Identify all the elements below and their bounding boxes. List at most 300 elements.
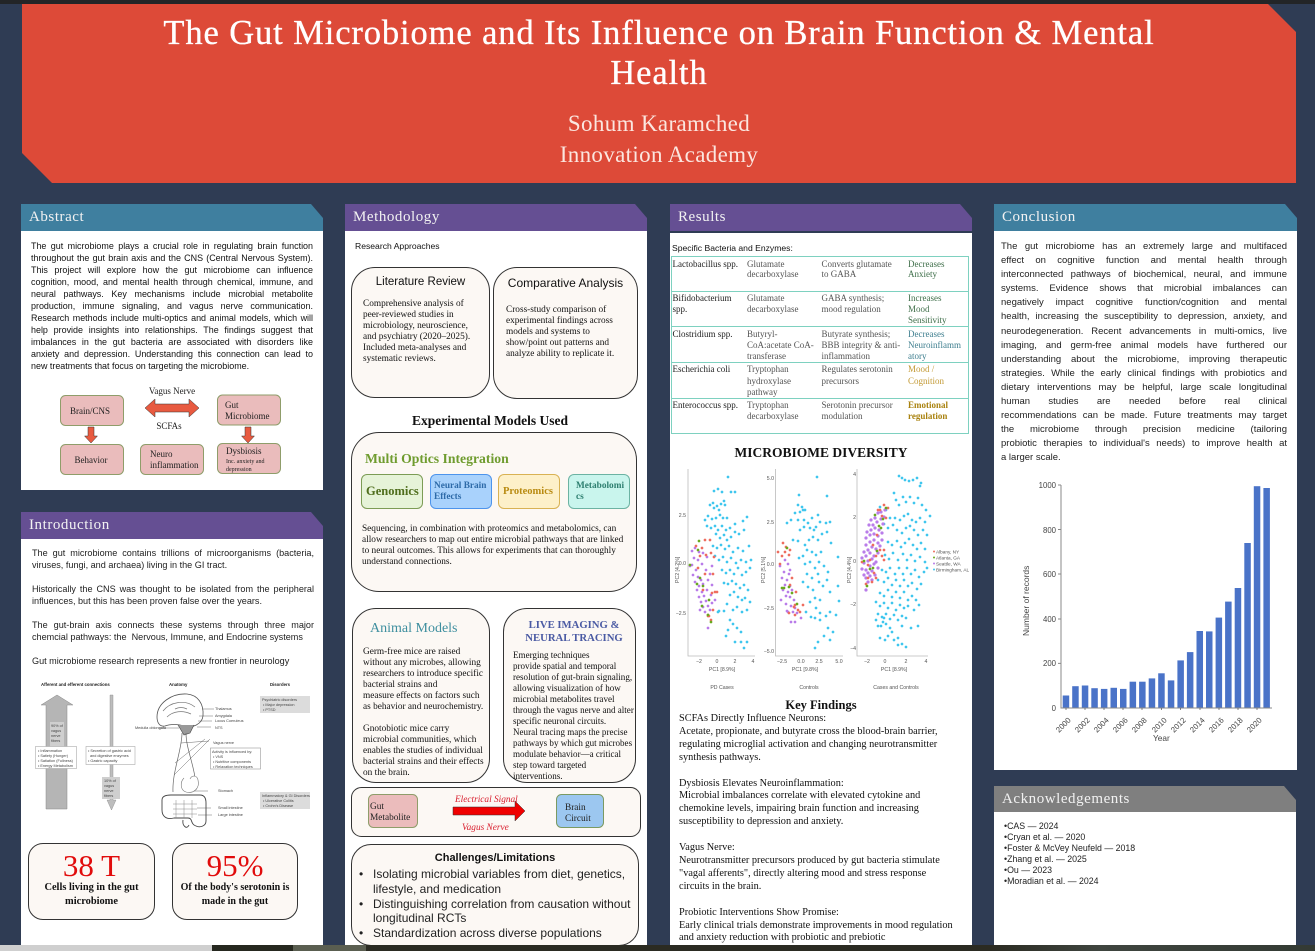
signal flow diagram: Vagus Nerve <box>462 823 509 833</box>
bar chart: number of records by year: Number of records <box>1021 566 1031 636</box>
animal models text: enables the studies of individual <box>363 746 483 756</box>
comparative analysis text <box>506 305 614 359</box>
key findings text: chemokine levels, impairing brain function and increasing <box>679 803 919 814</box>
conclusion text: neurodegeneration. Recent advancements in multi-omics, live <box>1001 326 1287 337</box>
live imaging text: modulate behavior—a critical <box>513 749 621 759</box>
gut-brain anatomy figure: fibers <box>104 794 113 798</box>
gut-brain anatomy figure: Inflammatory & GI Disorders <box>262 794 310 798</box>
scatter plot axes and legend: 4 <box>752 659 755 665</box>
bacteria and enzymes table: decarboxylase <box>747 304 798 314</box>
animal models text: bacterial strains and <box>363 680 437 690</box>
scatter plot axes and legend: −4 <box>850 646 856 652</box>
gut-brain axis flow diagram: Microbiome <box>225 411 270 421</box>
conclusion heading <box>994 204 1297 231</box>
author and school: Innovation Academy <box>560 142 758 167</box>
signal flow diagram: Circuit <box>565 814 591 824</box>
gut-brain anatomy figure: 90% of <box>51 724 64 728</box>
gut-brain anatomy figure: 10% of <box>104 779 117 783</box>
challenges list: Distinguishing correlation from causation without <box>373 897 630 911</box>
scatter plot axes and legend: Albany, NY <box>936 550 960 554</box>
key findings text: "vagal afferents", directly altering mood and stress response <box>679 868 926 879</box>
signal flow diagram: Metabolite <box>370 813 410 823</box>
abstract text: new treatments that focus on targeting the microbiome. <box>31 361 249 371</box>
gut-brain anatomy figure: Psychiatric disorders <box>262 698 297 702</box>
live imaging text: provide spatial and temporal <box>513 661 616 671</box>
key findings text: Neurotransmitter precursors produced by gut bacteria stimulate <box>679 855 940 866</box>
bacteria and enzymes table: hydroxylase <box>747 376 791 386</box>
challenges list: lifestyle, and medication <box>373 882 501 896</box>
results heading <box>670 204 972 231</box>
gut-brain anatomy figure: Disorders <box>270 682 291 687</box>
comparative analysis text: Cross-study comparison of <box>506 305 606 315</box>
chip: proteomics: Proteomics <box>503 486 553 497</box>
chip: metabolomics: cs <box>576 492 584 502</box>
introduction text: viruses, fungi, and archaea) living in the GI tract. <box>32 560 227 570</box>
scatter plot axes and legend: −2.5 <box>777 659 787 665</box>
acknowledgements list: •CAS — 2024 <box>1004 821 1058 831</box>
introduction heading <box>21 512 323 539</box>
gut-brain anatomy figure: vagus <box>51 729 61 733</box>
multi optics text: understand connections. <box>362 557 452 567</box>
author and school: Sohum Karamched <box>568 111 750 136</box>
bacteria and enzymes table: Increases <box>908 293 942 303</box>
scatter plot axes and legend: 2.5 <box>767 520 774 526</box>
gut-brain axis flow diagram: Inc. anxiety and <box>226 459 264 465</box>
abstract text: imbalances in the gut bacteria are associated with disorders like <box>31 337 313 347</box>
chip: neural brain effects: Neural Brain <box>434 480 486 490</box>
bacteria and enzymes table: Butyrate synthesis; <box>822 329 890 339</box>
animal models text: on the brain. <box>363 768 410 778</box>
bacteria and enzymes table: Escherichia coli <box>672 364 731 374</box>
scatter plot axes and legend: PC1 [9.8%] <box>792 667 819 673</box>
gut-brain anatomy figure: Thalamus <box>215 707 232 711</box>
bacteria and enzymes table: Tryptophan <box>747 400 789 410</box>
scatter plot axes and legend: Seattle, WA <box>936 562 961 566</box>
introduction text: Gut microbiome research represents a new frontier in neurology <box>32 656 289 666</box>
introduction heading: Introduction <box>29 517 110 533</box>
abstract text: cognition, mood, and mental health through chemical, immune, and <box>31 277 313 287</box>
animal models text: without any microbes, allowing <box>363 658 481 668</box>
introduction text: chemcial pathways: the Nervous, Immune, and Endocrine systems <box>32 632 303 642</box>
gut-brain axis flow diagram: Gut <box>225 400 239 410</box>
gut-brain axis flow diagram: Brain/CNS <box>70 406 110 416</box>
conclusion text: strategies. While the early clinical findings with probiotics and <box>1001 368 1287 379</box>
methodology body background <box>345 231 647 945</box>
bacteria and enzymes table: pathway <box>747 387 778 397</box>
scatter plot axes and legend: 0 <box>716 659 719 665</box>
scatter plot axes and legend: Atlanta, GA <box>936 556 961 560</box>
gut-brain anatomy figure: Locus Coeruleus <box>215 719 244 723</box>
gut-brain axis flow diagram: Vagus Nerve <box>149 386 195 396</box>
conclusion text: probiotic therapies to individual's needs) to improve health at <box>1001 438 1287 449</box>
scatter plot axes and legend: PC1 [8.9%] <box>709 667 736 673</box>
live imaging text: interventions. <box>513 771 562 781</box>
scatter plot axes and legend: Controls <box>799 685 819 691</box>
conclusion text: recommendations can be made. Future treatments may target <box>1001 410 1287 421</box>
live imaging text: pathways by which gut microbes <box>513 738 632 748</box>
bacteria and enzymes table: modulation <box>822 411 863 421</box>
bar chart: number of records by year: 2008 <box>1130 716 1149 734</box>
stat caption: cells in gut: Cells living in the gut <box>44 882 139 893</box>
gut-brain anatomy figure: NTS <box>215 726 223 730</box>
gut-brain anatomy figure: Large intestine <box>218 813 243 817</box>
challenges list: • <box>359 897 363 911</box>
challenges title: Challenges/Limitations <box>435 852 555 864</box>
key findings text: susceptibility to depression and anxiety. <box>679 816 843 827</box>
gut-brain anatomy figure: Vagus nerve <box>213 741 234 745</box>
bacteria and enzymes table: regulation <box>908 411 947 421</box>
scatter plot axes and legend: 2.5 <box>679 513 686 519</box>
conclusion body background <box>994 231 1297 770</box>
gut-brain anatomy figure: Small intestine <box>218 806 243 810</box>
acknowledgements list: •Ou — 2023 <box>1004 865 1052 875</box>
bar chart: number of records by year: 600 <box>1043 570 1057 579</box>
animal models text: Germ-free mice are raised <box>363 647 460 657</box>
title: The Gut Microbiome and Its Influence on Brain Function & Mental <box>163 14 1155 52</box>
comparative analysis title: Comparative Analysis <box>508 276 623 290</box>
microbiome diversity heading: MICROBIOME DIVERSITY <box>735 445 907 460</box>
gut-brain axis flow diagram: Behavior <box>74 455 108 465</box>
scatter plot axes and legend: 2 <box>734 659 737 665</box>
bar chart: number of records by year: 2010 <box>1150 715 1169 734</box>
live imaging text <box>513 650 634 781</box>
comparative analysis text: show/point out patterns and <box>506 338 609 348</box>
gut-brain anatomy figure: nerve <box>104 789 114 793</box>
abstract text: production, immune signaling, and vagus nerve communication. <box>31 301 313 311</box>
gut-brain axis flow diagram: Dysbiosis <box>226 446 262 456</box>
scatter plot axes and legend: 0.0 <box>797 659 805 665</box>
key findings text: Probiotic Interventions Show Promise: <box>679 907 839 918</box>
multi optics text: Sequencing, in combination with proteomics and metabolomics, can <box>362 524 616 534</box>
bacteria and enzymes table: CoA:acetate CoA- <box>747 340 814 350</box>
bacteria and enzymes table: inflammation <box>822 351 870 361</box>
scatter plot axes and legend: Cases and Controls <box>873 685 919 691</box>
signal flow diagram: Gut <box>370 802 384 812</box>
gut-brain anatomy figure: • Satiety (Hunger) <box>38 754 69 758</box>
conclusion text: The gut microbiome has an extremely large and multifaced <box>1001 241 1287 252</box>
bacteria and enzymes table: Lactobacillus spp. <box>672 259 738 269</box>
abstract text <box>31 241 313 371</box>
gut-brain axis flow diagram <box>60 386 281 475</box>
scatter plot axes and legend: −2.5 <box>764 606 774 612</box>
chip: neural brain effects <box>430 474 492 509</box>
bottom screen edge strip <box>0 945 1315 951</box>
abstract text: This project will explore how the gut microbiome can influence <box>31 265 313 275</box>
scatter plot axes and legend: Birmingham, AL <box>936 568 969 572</box>
key findings text: Dysbiosis Elevates Neuroinflammation: <box>679 778 844 789</box>
bar chart: number of records by year: 2002 <box>1073 716 1092 734</box>
scatter plot axes and legend: 2.5 <box>815 659 823 665</box>
animal models text: Gnotobiotic mice carry <box>363 724 449 734</box>
scatter plot axes and legend: 5.0 <box>835 659 843 665</box>
key findings text: Acetate, propionate, and butyrate cross the blood-brain barrier, <box>679 726 938 737</box>
bacteria and enzymes table: GABA synthesis; <box>822 293 884 303</box>
bacteria and enzymes table: Bifidobacterium <box>672 293 731 303</box>
live imaging title <box>525 619 623 644</box>
live imaging text: Neural tracing maps the precise <box>513 727 628 737</box>
bacteria and enzymes table: precursors <box>822 376 859 386</box>
bacteria and enzymes table: Butyryl- <box>747 329 778 339</box>
introduction text: influences, but this has been proven false over the years. <box>32 596 262 606</box>
gut-brain anatomy figure: • Energy Metabolism <box>38 764 73 768</box>
scatter plot axes and legend: PC2 [5.1%] <box>761 556 767 583</box>
live imaging text: step toward targeted <box>513 760 586 770</box>
acknowledgements list: •Foster & McVey Neufeld — 2018 <box>1004 843 1135 853</box>
bacteria and enzymes table: Glutamate <box>747 259 784 269</box>
methodology heading: Methodology <box>353 209 440 225</box>
stat caption: cells in gut: microbiome <box>65 896 118 907</box>
gut-brain anatomy figure: • Major depression <box>263 703 295 707</box>
gut-brain anatomy figure: Afferent and efferent connections <box>41 682 110 687</box>
bacteria and enzymes table: Anxiety <box>908 269 937 279</box>
results heading: Results <box>678 209 726 225</box>
stat number: 38 T: 38 T <box>63 848 120 883</box>
methodology heading <box>345 204 647 231</box>
gut-brain anatomy figure: Medulla oblongata <box>135 726 167 730</box>
gut-brain anatomy figure: nerve <box>51 734 60 738</box>
conclusion text: interconnected pathways of biochemical, neural, and immune <box>1001 269 1287 280</box>
bacteria and enzymes table: Decreases <box>908 329 945 339</box>
bar chart: number of records by year: 2004 <box>1092 715 1111 734</box>
gut-brain anatomy figure: • Crohn's Disease <box>263 804 293 808</box>
bar chart: number of records by year: 400 <box>1043 615 1057 624</box>
animal models text: measure effects on factors such <box>363 691 480 701</box>
scatter plot axes and legend: −2 <box>864 659 870 665</box>
introduction text: The gut microbiome contains trillions of microorganisms (bacteria, <box>32 548 314 558</box>
animal models text: microbial communities, which <box>363 735 476 745</box>
bacteria and enzymes table: spp. <box>672 304 687 314</box>
scatter plot axes and legend: PD Cases <box>710 685 734 691</box>
scatter plot axes and legend: −2.5 <box>676 611 686 617</box>
scatter plot axes and legend: PC1 [8.9%] <box>881 667 908 673</box>
chip: proteomics <box>498 474 560 509</box>
gut-brain axis flow diagram: SCFAs <box>156 421 182 431</box>
gut-brain anatomy figure: and digestive enzymes <box>90 754 129 758</box>
bacteria and enzymes table: mood regulation <box>822 304 881 314</box>
live imaging text: resolution of gut-brain signaling, <box>513 672 632 682</box>
abstract text: The gut microbiome plays a crucial role in regulating brain function <box>31 241 313 251</box>
bacteria and enzymes table: Tryptophan <box>747 364 789 374</box>
scatter plot axes and legend: PC2 [4.2%] <box>675 556 681 583</box>
stat number: 95%: 95% <box>207 848 263 883</box>
scatter plot axes and legend: 0 <box>853 559 856 565</box>
animal models text: bacterial strains and their effects <box>363 757 484 767</box>
stat caption: cells in gut <box>44 882 139 907</box>
gut-brain axis flow diagram: inflammation <box>150 460 199 470</box>
live imaging text: allowing visualization of how <box>513 683 621 693</box>
experimental models heading: Experimental Models Used <box>412 413 568 428</box>
animal models title: Animal Models <box>370 621 458 636</box>
bar chart: number of records by year: 0 <box>1052 704 1057 713</box>
gut-brain anatomy figure: vagus <box>104 784 114 788</box>
gut-brain anatomy figure: Anatomy <box>169 682 188 687</box>
literature review text: and psychiatry (2020–2025). <box>363 332 470 342</box>
literature review text: microbiology, neuroscience, <box>363 321 468 331</box>
comparative analysis text: experimental findings across <box>506 316 613 326</box>
bacteria and enzymes table: atory <box>908 351 927 361</box>
key findings text: regulating microglial activation and changing neurotransmitter <box>679 739 937 750</box>
conclusion text: negatively impact cognitive function/cognition and mental <box>1001 297 1287 308</box>
bacteria and enzymes table: Regulates serotonin <box>822 364 893 374</box>
abstract body background <box>21 231 323 490</box>
panel: conclusion <box>994 204 1297 770</box>
literature review text <box>363 299 470 364</box>
bar chart: number of records by year: 2016 <box>1207 716 1226 734</box>
conclusion text: dietary interventions may be helpful, large scale longitudinal <box>1001 382 1287 393</box>
bacteria and enzymes table: Enterococcus spp. <box>672 400 738 410</box>
chip: genomics: Genomics <box>366 484 419 498</box>
key findings text: circuits in the brain. <box>679 881 761 892</box>
bacteria and enzymes table: decarboxylase <box>747 411 798 421</box>
chip: metabolomics: Metabolomi <box>576 480 624 490</box>
literature review text: systematic reviews. <box>363 354 436 364</box>
animal models text: as behavior and neurochemistry. <box>363 702 483 712</box>
key findings text: Microbial imbalances correlate with elevated cytokine and <box>679 790 920 801</box>
panel: results <box>670 204 972 945</box>
bacteria and enzymes table: Clostridium spp. <box>672 329 733 339</box>
scatter plot axes and legend: 0 <box>884 659 887 665</box>
stat caption: serotonin: Of the body's serotonin is <box>181 882 289 893</box>
stat caption: serotonin: made in the gut <box>202 896 268 907</box>
live imaging title: LIVE IMAGING & <box>529 619 619 631</box>
introduction text: The gut-brain axis connects these systems through three major <box>32 620 314 630</box>
gut-brain anatomy figure: • Relaxation techniques <box>213 765 253 769</box>
bar chart: number of records by year: 800 <box>1043 526 1057 535</box>
scatter plots: microbiome diversity <box>675 469 969 691</box>
abstract text: anxiety and depression. Understanding this connection can lead to <box>31 349 313 359</box>
live imaging text: specific neuronal circuits. <box>513 716 606 726</box>
literature review text: Comprehensive analysis of <box>363 299 464 309</box>
literature review text: peer-reviewed studies in <box>363 310 454 320</box>
live imaging text: microbial metabolites travel <box>513 694 614 704</box>
comparative analysis text: analyze ability to replicate it. <box>506 349 614 359</box>
gut-brain anatomy figure: Amygdala <box>215 714 233 718</box>
panel: acknowledgements <box>994 786 1296 945</box>
multi optics text: allow researchers to map out entire microbial pathways that are linked <box>362 535 623 545</box>
scatter plot axes and legend: −5.0 <box>764 649 774 655</box>
gut-brain anatomy figure: • Gastric capacity <box>88 759 117 763</box>
comparative analysis text: models and systems to <box>506 327 590 337</box>
results body background <box>670 233 972 945</box>
conclusion text: effect on cognitive function and mental health through <box>1001 255 1287 266</box>
card: live imaging and neural tracing <box>503 608 636 783</box>
acknowledgements heading <box>994 786 1296 813</box>
bacteria and enzymes table: decarboxylase <box>747 269 798 279</box>
title: Health <box>610 54 708 92</box>
gut-brain anatomy figure: • Ulcerative Colitis <box>263 799 294 803</box>
conclusion text: the microbiome through precision medicine (tailoring <box>1001 424 1287 435</box>
acknowledgements body background <box>994 812 1296 945</box>
acknowledgements list: •Moradian et al. — 2024 <box>1004 876 1099 886</box>
panel: methodology <box>345 204 647 945</box>
conclusion text <box>1001 241 1287 463</box>
bacteria and enzymes table: Mood / <box>908 364 935 374</box>
gut-brain anatomy figure: • Secretion of gastric acid <box>88 749 131 753</box>
gut-brain anatomy figure: • PTSD <box>263 708 276 712</box>
literature review text: Included meta-analyses and <box>363 343 466 353</box>
bacteria and enzymes table: Sensitivity <box>908 315 947 325</box>
bacteria and enzymes table: Serotonin precursor <box>822 400 893 410</box>
live imaging title: NEURAL TRACING <box>525 632 623 644</box>
bar chart: number of records by year: 2012 <box>1169 716 1188 734</box>
key findings heading: Key Findings <box>785 698 857 712</box>
live imaging text: through the vagus nerve and alter <box>513 705 634 715</box>
introduction body background <box>21 539 323 945</box>
multi optics text <box>362 524 624 567</box>
gut-brain axis flow diagram: Neuro <box>150 449 173 459</box>
key findings text: Vagus Nerve: <box>679 842 735 853</box>
abstract heading <box>21 204 323 231</box>
challenges list: longitudinal RCTs <box>373 911 466 925</box>
abstract text: help provide insights into relationships. The findings suggest that <box>31 325 313 335</box>
gut-brain anatomy figure: Activity is influenced by: <box>212 750 252 754</box>
bacteria and enzymes table: Emotional <box>908 400 949 410</box>
live imaging text: Emerging techniques <box>513 650 589 660</box>
bar chart: number of records by year: 1000 <box>1039 481 1057 490</box>
title <box>163 14 1155 92</box>
multi optics text: to neural outcomes. This allows for experiments that can thoroughly <box>362 546 616 556</box>
gut-brain anatomy figure <box>35 682 310 828</box>
challenges list: Isolating microbial variables from diet, genetics, <box>373 867 625 881</box>
scatter plot axes and legend: PC2 [4.4%] <box>847 556 853 583</box>
scatter plot axes and legend: −2 <box>696 659 702 665</box>
abstract heading: Abstract <box>29 209 84 225</box>
key findings text: and anxiety reduction with probiotic and prebiotic <box>679 932 885 943</box>
gut-brain anatomy figure: • Nutritive components <box>213 760 251 764</box>
top edge strip <box>0 0 1315 4</box>
bar chart: number of records by year: 2006 <box>1111 716 1130 734</box>
scatter plot axes and legend: −2 <box>850 602 856 608</box>
scatter plot axes and legend: 0.0 <box>679 561 686 567</box>
bar chart: number of records by year: 2020 <box>1245 715 1264 734</box>
gut-brain anatomy figure: • VNS <box>213 755 224 759</box>
signal flow diagram: Electrical Signal <box>454 795 518 805</box>
gut-brain anatomy figure: Stomach <box>218 789 233 793</box>
scatter plot axes and legend: 4 <box>925 659 928 665</box>
bacteria and enzymes table: Converts glutamate <box>822 259 892 269</box>
author and school <box>560 111 758 167</box>
challenges list: • <box>359 926 363 940</box>
key findings text: Early clinical trials demonstrate improvements in mood regulation <box>679 920 953 930</box>
bar chart: number of records by year <box>1021 481 1272 743</box>
bar chart: number of records by year: Year <box>1153 733 1170 743</box>
challenges list: • <box>359 867 363 881</box>
key findings text: SCFAs Directly Influence Neurons: <box>679 713 826 724</box>
scatter plot axes and legend: 0.0 <box>767 562 774 568</box>
acknowledgements list: •Zhang et al. — 2025 <box>1004 854 1087 864</box>
controls points <box>778 477 839 648</box>
panel: abstract <box>21 204 323 490</box>
introduction text <box>32 548 314 666</box>
scatter plot axes and legend: 5.0 <box>767 476 774 482</box>
chip: neural brain effects: Effects <box>434 492 461 502</box>
bacteria and enzymes table: Mood <box>908 304 930 314</box>
acknowledgements list <box>1004 821 1135 886</box>
stat card: 38 T <box>28 843 155 920</box>
conclusion heading: Conclusion <box>1002 209 1076 225</box>
chip: metabolomics <box>568 474 630 509</box>
bacteria and enzymes table: BBB integrity & anti- <box>822 340 900 350</box>
gut-brain anatomy figure: • Satiation (Fullness) <box>38 759 74 763</box>
gut-brain anatomy figure: fibers <box>51 739 60 743</box>
abstract text: neural pathways. Key mechanisms include microbial metabolite <box>31 289 313 299</box>
animal models text <box>363 647 484 778</box>
card: animal models <box>352 608 490 783</box>
bacteria and enzymes table: transferase <box>747 351 786 361</box>
signal flow diagram <box>351 787 641 837</box>
bacteria and enzymes table: Cognition <box>908 376 945 386</box>
bacteria and enzymes table: Decreases <box>908 259 945 269</box>
